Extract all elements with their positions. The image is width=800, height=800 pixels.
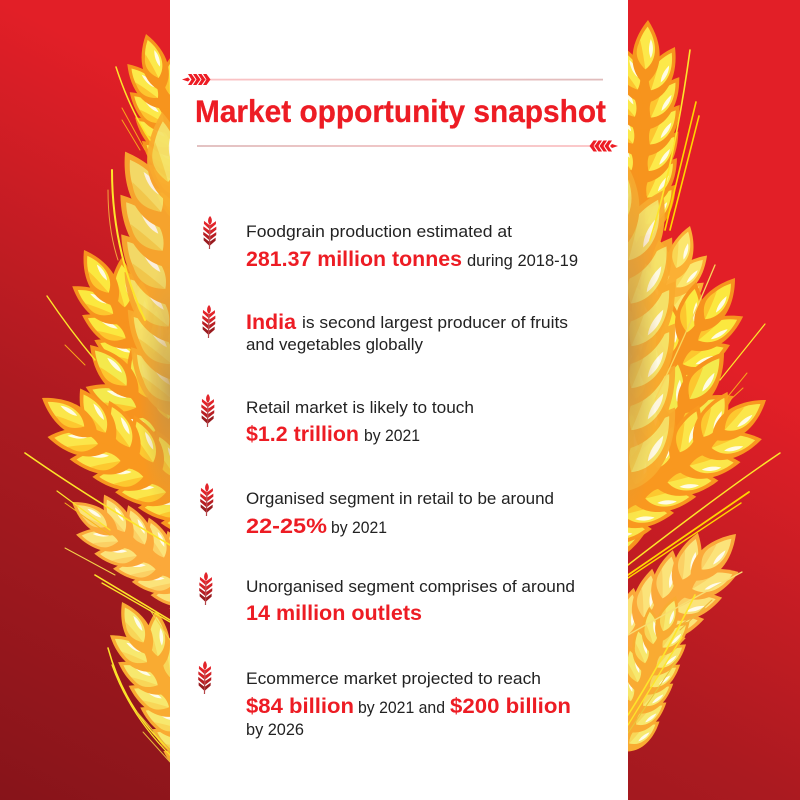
item 1 text <box>246 223 578 271</box>
item 3 text: $1.2 trillion <box>246 422 359 446</box>
item 4 text: by 2021 <box>331 519 387 537</box>
right wheat ear: large pale at edge <box>543 150 693 504</box>
icon: wheat <box>200 483 214 516</box>
title: Market opportunity snapshot <box>195 93 606 129</box>
white centre panel <box>170 0 628 800</box>
icon: wheat <box>203 216 217 249</box>
left shading <box>138 260 202 520</box>
icon: wheat <box>198 661 212 694</box>
item 3: retail market <box>201 394 474 446</box>
item 2 text: and vegetables globally <box>246 336 424 354</box>
item 3 text <box>246 399 474 446</box>
item 6 text <box>246 670 571 739</box>
icon: wheat <box>202 305 216 338</box>
item 1 text: during 2018-19 <box>467 252 578 270</box>
icon: wheat <box>199 572 213 605</box>
item 1 text: Foodgrain production estimated at <box>246 223 512 241</box>
item 2 text <box>246 310 568 354</box>
left wheat ear: lower pale <box>49 469 254 646</box>
item 6 text: $200 billion <box>450 694 571 718</box>
item 6 text: by 2021 and <box>358 699 445 717</box>
top ornament: line and wheat <box>182 74 603 85</box>
item 1 text: 281.37 million tonnes <box>246 247 462 271</box>
left wheat illustration <box>15 22 295 800</box>
right wheat ear: middle orange <box>523 319 769 599</box>
item 2 text: India <box>246 310 297 334</box>
right wheat illustration <box>523 18 795 768</box>
item 4 text <box>246 490 554 538</box>
right wheat ear: far right <box>550 360 795 575</box>
right wheat ear: top <box>589 18 695 246</box>
item 5 text: Unorganised segment comprises of around <box>246 578 575 596</box>
item 5: unorganised segment <box>199 572 575 625</box>
item 3 text: by 2021 <box>364 427 420 445</box>
item 6 text: Ecommerce market projected to reach <box>246 670 541 688</box>
icon: wheat <box>201 394 215 427</box>
left wheat ear: bottom pale <box>83 581 258 800</box>
item 2: fruits and vegetables <box>202 305 568 354</box>
item 1: foodgrain production <box>203 216 578 271</box>
left wheat ear: large pale <box>95 106 257 435</box>
left wheat ear: top <box>104 22 245 246</box>
left wheat ear: middle orange <box>51 310 295 564</box>
left wheat ear: far left <box>15 358 261 568</box>
left wheat ear: upper orange <box>43 226 237 468</box>
item 4 text: Organised segment in retail to be around <box>246 490 554 508</box>
right wheat ear: bottom pale <box>584 584 710 768</box>
right wheat awns <box>628 50 780 733</box>
left wheat awns <box>25 67 170 762</box>
right wheat ear: upper orange <box>560 249 775 494</box>
item 2 text: is second largest producer of fruits <box>302 314 568 332</box>
right wheat ear: upper pale <box>588 213 730 430</box>
item 6 text: $84 billion <box>246 694 354 718</box>
item 4: organised retail <box>200 483 554 538</box>
item 3 text: Retail market is likely to touch <box>246 399 474 417</box>
item 6: ecommerce market <box>198 661 571 739</box>
item 6 text: by 2026 <box>246 721 304 739</box>
item 5 text <box>246 578 575 625</box>
item 4 text: 22-25% <box>246 514 327 538</box>
right shading <box>598 165 658 525</box>
item 5 text: 14 million outlets <box>246 601 422 625</box>
right wheat ear: lower pale <box>546 501 770 728</box>
bottom ornament: line and wheat <box>197 140 618 152</box>
